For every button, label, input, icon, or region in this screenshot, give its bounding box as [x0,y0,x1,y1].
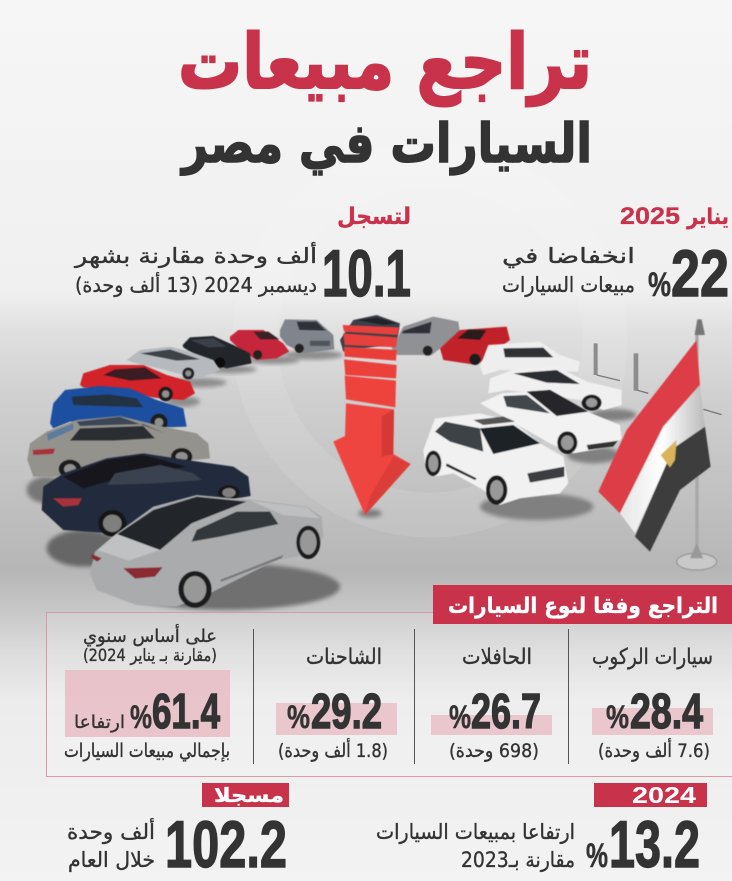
car: black sedan [183,336,252,368]
car: white sedan middle [480,390,622,454]
stat: 2024 increase: 2024 [632,782,696,808]
column: passenger cars: % [606,699,629,735]
car: blue hatch [50,386,187,431]
icon: Egyptian flag [598,319,717,570]
stat: 10.1 thousand units: لتسجل [337,204,411,230]
column: passenger cars [592,645,713,762]
car: grey minivan [392,317,460,356]
cars: left row [27,319,343,610]
car: dark navy sedan [42,453,251,537]
car: silver sedan foreground [90,495,323,608]
stat: 10.1 thousand units: ديسمبر 2024 (13 ألف وحدة) [75,272,317,297]
stat: January 2025 decline: انخفاضا في [502,244,635,268]
column: annual total increase: بإجمالي مبيعات السيارات [64,740,230,763]
column: buses: (698 وحدة) [449,740,539,762]
column: passenger cars: 28.4 [630,685,703,739]
car: white compact [480,342,580,375]
column: annual total increase: % [130,699,152,735]
column: buses: 26.7 [471,685,541,739]
car: dark SUV [340,315,400,352]
stat: 2024 increase: % [586,837,608,875]
column: annual total increase: على أساس سنوي [83,624,217,647]
stat: 10.1 thousand units: 10.1 [322,236,411,310]
heading: decline by vehicle type [433,585,732,624]
icon: red down arrow [333,325,411,517]
stat: 102.2 thousand units recorded: ألف وحدة [67,818,155,844]
column: trucks: 29.2 [311,685,382,739]
cars: right row [333,315,722,570]
stat: 102.2 thousand units recorded: خلال العام [68,848,155,872]
stat: January 2025 decline: 2025 [620,203,680,230]
column: trucks [276,645,397,762]
column: trucks: (1.8 ألف وحدة) [278,738,388,762]
stat: January 2025 decline [502,203,729,310]
icon: charging posts [594,343,722,415]
column: passenger cars: سيارات الركوب [592,645,713,670]
title: تراجع مبيعات [178,17,592,107]
column: passenger cars: (7.6 ألف وحدة) [598,738,710,762]
car: grey sedan [27,416,210,478]
car: red compact [440,327,510,365]
stat: 102.2 thousand units recorded [67,783,289,881]
car: white sedan rear [488,367,622,411]
stat: 2024 increase: ارتفاعا بمبيعات السيارات [376,820,575,844]
column: buses: الحافلات [462,645,532,670]
column: buses: % [449,699,471,735]
stat: 10.1 thousand units: ألف وحدة مقارنة بشهر [74,242,317,268]
car: red coupe [80,365,195,401]
column: buses [431,645,552,762]
column: annual total increase: (مقارنة بـ يناير 2024) [83,646,217,666]
column: trucks: الشاحنات [306,645,382,670]
stat: January 2025 decline: % [648,266,671,304]
car: grey SUV [280,319,334,353]
stat: 10.1 thousand units [74,204,411,310]
column: annual total increase: ارتفاعا [74,712,125,733]
stat: 102.2 thousand units recorded: مسجلا [214,783,284,807]
column: annual total increase: 61.4 [152,685,220,739]
title: السيارات في مصر [179,112,592,175]
stat: 2024 increase [376,782,707,881]
car: silver hatch [127,347,220,379]
panel: decline by vehicle type [46,585,732,776]
column: trucks: % [287,699,310,735]
car: white SUV foreground [423,413,568,505]
title [178,17,592,175]
stat: 2024 increase: مقارنة بـ2023 [461,848,575,872]
stat: January 2025 decline: مبيعات السيارات [502,273,635,297]
stat: 102.2 thousand units recorded: 102.2 [165,807,287,881]
car: red hatch [230,330,289,360]
column: annual total increase [64,624,230,763]
